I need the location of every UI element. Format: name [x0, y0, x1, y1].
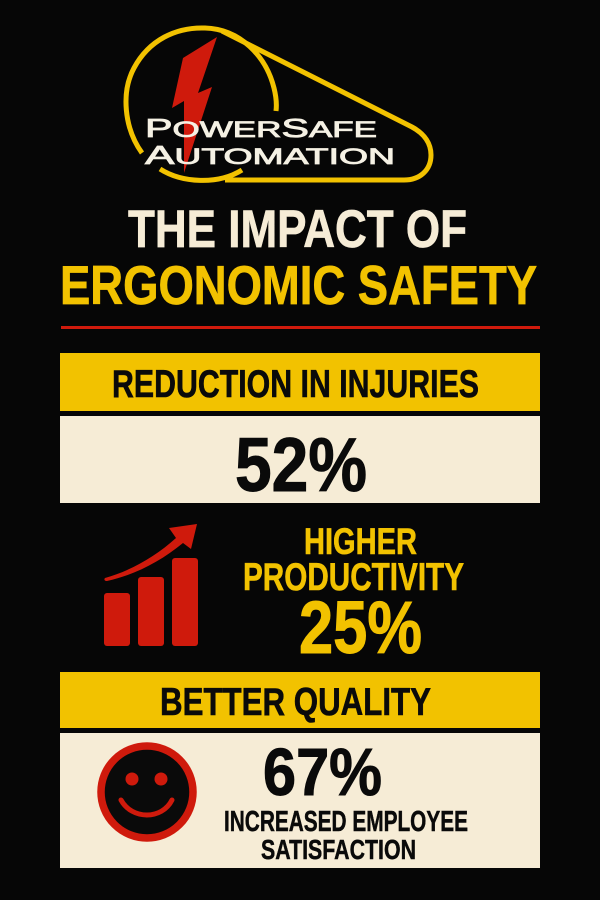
panel: higher productivity: PRODUCTIVITY	[243, 556, 464, 599]
heading band	[60, 353, 540, 411]
logo outline	[126, 28, 431, 180]
panel background	[60, 733, 540, 868]
value: 25%	[299, 586, 422, 669]
panel: better quality	[60, 672, 540, 728]
logo text: A UTOMATION	[145, 140, 395, 170]
logo text	[145, 113, 395, 170]
panel: employee satisfaction	[60, 733, 540, 868]
value: 67%	[263, 735, 382, 810]
logo: PowerSafe Automation	[126, 28, 431, 180]
value band	[60, 416, 540, 503]
icon: smiley face	[101, 746, 193, 838]
icon: rising bar chart	[104, 524, 198, 646]
label: HIGHER	[304, 521, 417, 562]
label: INCREASED EMPLOYEE	[224, 806, 468, 838]
value: 52%	[235, 423, 367, 508]
panel: reduction in injuries	[60, 353, 540, 508]
panel: higher productivity	[104, 521, 464, 669]
logo text: P OWER S AFE	[145, 113, 377, 143]
icon: lightning bolt	[172, 37, 217, 173]
title: THE IMPACT OF	[128, 200, 467, 259]
heading: BETTER QUALITY	[160, 681, 431, 724]
heading: REDUCTION IN INJURIES	[112, 363, 479, 406]
heading band	[60, 672, 540, 728]
panel: employee satisfaction: SATISFACTION	[261, 834, 416, 865]
title	[60, 200, 537, 316]
